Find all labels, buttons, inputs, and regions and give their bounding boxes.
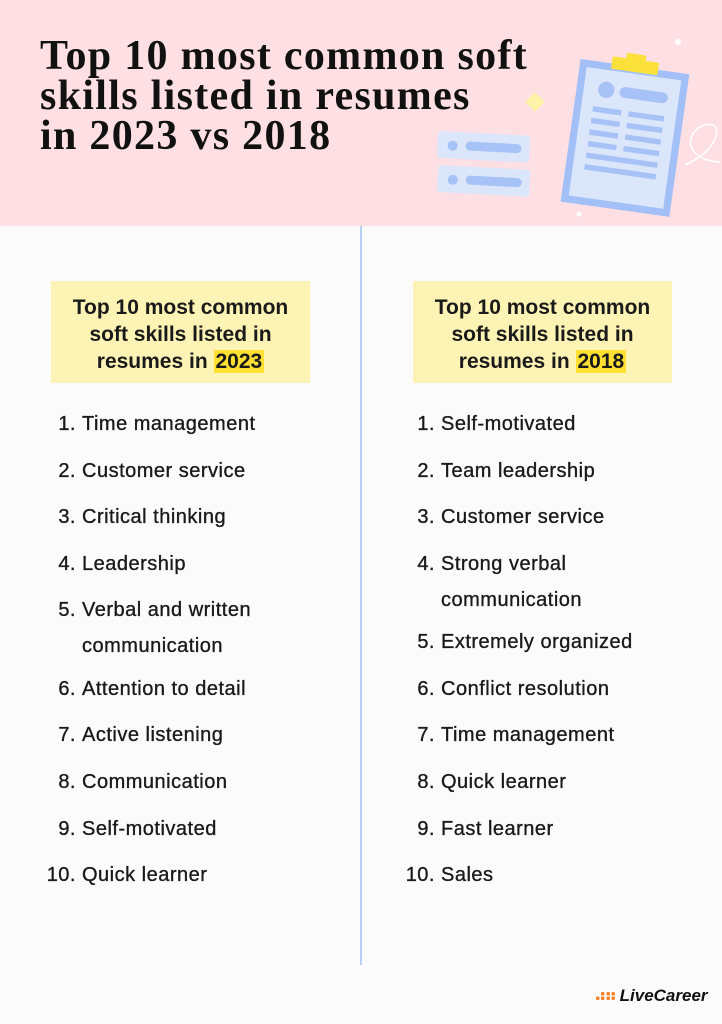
title: Top 10 most common soft (40, 33, 528, 79)
illustration: clipboard and cards (437, 39, 720, 217)
list: 2018: Team leadership (441, 460, 595, 482)
list: 2023: Communication (82, 771, 227, 793)
list: 2023: 6. (58, 678, 76, 700)
list: 2018: Conflict resolution (441, 678, 609, 700)
center divider (360, 226, 362, 965)
list: 2023: 1. (58, 413, 76, 435)
list: 2023: 4. (58, 553, 76, 575)
box: 2023 heading: Top 10 most common (73, 296, 288, 319)
list: 2018: 4. (417, 553, 435, 575)
title: in 2023 vs 2018 (40, 113, 331, 159)
list: 2018: 3. (417, 506, 435, 528)
box: 2018 heading: soft skills listed in (451, 323, 634, 346)
list: 2023: Customer service (82, 460, 246, 482)
box: 2018 heading: Top 10 most common (435, 296, 650, 319)
list: 2023: 10. (47, 864, 76, 886)
list: 2023 (47, 413, 256, 886)
list: 2023: 8. (58, 771, 76, 793)
title (40, 33, 528, 159)
list: 2023: 2. (58, 460, 76, 482)
list: 2023: 9. (58, 818, 76, 840)
list: 2018: Strong verbal (441, 553, 566, 575)
list: 2023: Active listening (82, 724, 223, 746)
list: 2023: 3. (58, 506, 76, 528)
logo: LiveCareer: ⠴⠶ LiveCareer (594, 986, 708, 1005)
list: 2023: Leadership (82, 553, 186, 575)
list: 2023: 5. (58, 599, 76, 621)
list: 2018: 8. (417, 771, 435, 793)
list: 2018: 9. (417, 818, 435, 840)
header band (0, 0, 722, 226)
list: 2023: Time management (82, 413, 256, 435)
list: 2018: Extremely organized (441, 631, 633, 653)
list: 2018: 2. (417, 460, 435, 482)
title: skills listed in resumes (40, 73, 471, 119)
list: 2018: Quick learner (441, 771, 566, 793)
list: 2023: Quick learner (82, 864, 207, 886)
list: 2018: 5. (417, 631, 435, 653)
list: 2023: Attention to detail (82, 678, 246, 700)
list: 2018: 1. (417, 413, 435, 435)
list: 2018: 10. (406, 864, 435, 886)
list: 2023: Self-motivated (82, 818, 217, 840)
list: 2018: Self-motivated (441, 413, 576, 435)
box: 2023 heading: soft skills listed in (89, 323, 272, 346)
list: 2023: 7. (58, 724, 76, 746)
list: 2018: 7. (417, 724, 435, 746)
list: 2023: communication (82, 635, 223, 657)
list: 2023: Verbal and written (82, 599, 251, 621)
list: 2018: Customer service (441, 506, 605, 528)
box: 2023 heading: resumes in 2023 (97, 350, 262, 373)
list: 2023: Critical thinking (82, 506, 226, 528)
box: 2023 heading (51, 281, 310, 383)
list: 2018: Fast learner (441, 818, 554, 840)
box: 2018 heading (413, 281, 672, 383)
list: 2018: communication (441, 589, 582, 611)
list: 2018: Sales (441, 864, 494, 886)
list: 2018 (406, 413, 633, 886)
list: 2018: 6. (417, 678, 435, 700)
list: 2018: Time management (441, 724, 614, 746)
box: 2018 heading: resumes in 2018 (459, 350, 624, 373)
